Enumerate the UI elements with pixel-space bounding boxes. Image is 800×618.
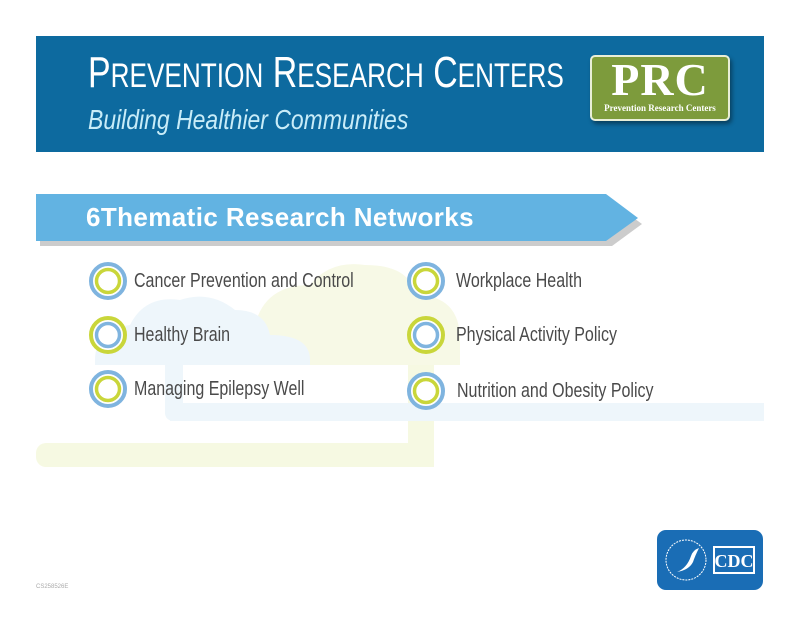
item: Cancer Prevention and Control — [89, 262, 354, 300]
item: Physical Activity Policy — [407, 316, 617, 354]
header banner — [36, 36, 764, 152]
item: Cancer Prevention and Control: Cancer Prevention and Control — [134, 270, 354, 292]
item: Physical Activity Policy: Physical Activity Policy — [456, 324, 617, 346]
section arrow banner — [36, 194, 642, 246]
item: Workplace Health: Workplace Health — [456, 270, 582, 292]
title: PREVENTION RESEARCH CENTERS — [88, 48, 564, 97]
footer code: CS258526E — [36, 584, 68, 590]
item: Healthy Brain: Healthy Brain — [134, 324, 230, 346]
item: Nutrition and Obesity Policy: Nutrition and Obesity Policy — [457, 380, 654, 402]
item: Managing Epilepsy Well: Managing Epilepsy Well — [134, 378, 304, 400]
item: Healthy Brain — [89, 316, 230, 354]
PRC logo — [590, 55, 730, 121]
section heading: 6Thematic Research Networks — [86, 202, 474, 232]
CDC/HHS logo — [657, 530, 763, 590]
subtitle: Building Healthier Communities — [88, 104, 408, 135]
item: Managing Epilepsy Well — [89, 370, 304, 408]
PRC logo: PRC — [611, 54, 709, 105]
PRC logo: Prevention Research Centers — [604, 103, 716, 113]
list: networks — [89, 262, 654, 410]
item: Nutrition and Obesity Policy — [407, 372, 654, 410]
CDC/HHS logo: CDC — [714, 551, 754, 571]
item: Workplace Health — [407, 262, 582, 300]
